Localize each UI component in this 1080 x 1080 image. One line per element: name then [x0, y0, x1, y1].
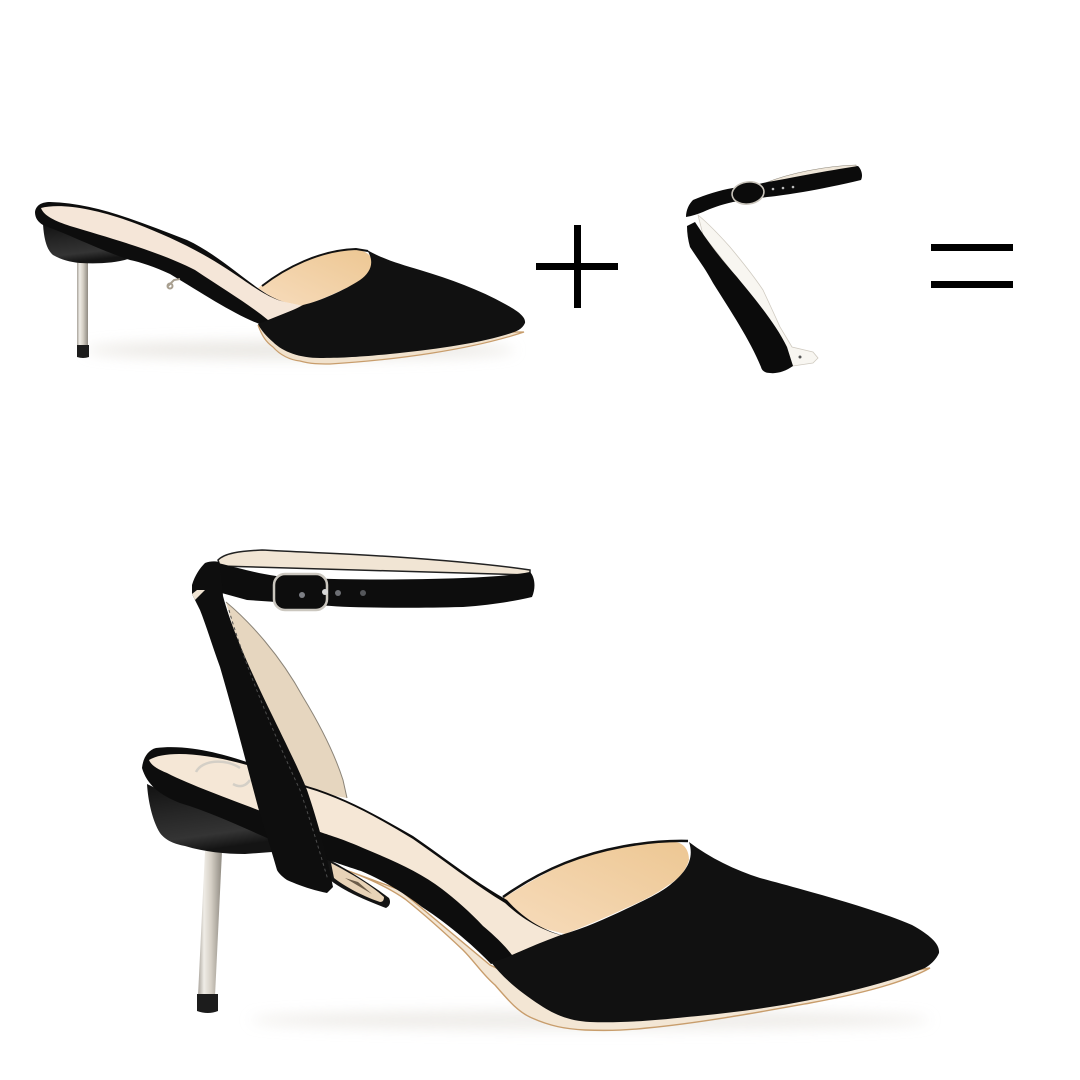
suede rim: [35, 202, 305, 325]
lower black band: [687, 222, 793, 373]
suede rim: [142, 747, 565, 964]
arch loop: [326, 858, 390, 908]
sole edge: [335, 866, 930, 1030]
suede vamp: [491, 842, 939, 1022]
heel counter lining: [226, 602, 347, 798]
equals sign: [931, 244, 1013, 288]
insole: [41, 206, 303, 320]
interior tan: [258, 250, 373, 306]
shoe: black pointed mule: [35, 202, 525, 364]
suede vamp: [258, 250, 525, 358]
shoe: finished slingback with ankle strap: [142, 550, 939, 1030]
interior tan: [500, 842, 689, 934]
diagonal strap: [192, 561, 333, 893]
ankle strap lining: [218, 550, 530, 575]
heel block: [147, 784, 272, 854]
buckle: [731, 180, 765, 206]
lower band white lining: [698, 215, 818, 366]
heel logo: [196, 762, 250, 786]
stiletto heel: [197, 851, 222, 1013]
strap lining top: [765, 165, 857, 185]
strap fold highlight: [192, 590, 205, 600]
ankle strap band: [686, 166, 862, 217]
strap accessory: [686, 165, 862, 373]
buckle: [274, 574, 327, 610]
ankle strap: [218, 563, 534, 610]
sole edge: [258, 325, 524, 364]
heel block: [43, 224, 128, 263]
insole: [149, 754, 561, 955]
strap stitching: [229, 610, 328, 880]
ornament: [168, 279, 180, 288]
stiletto heel: [77, 261, 89, 358]
plus sign: [536, 225, 618, 308]
